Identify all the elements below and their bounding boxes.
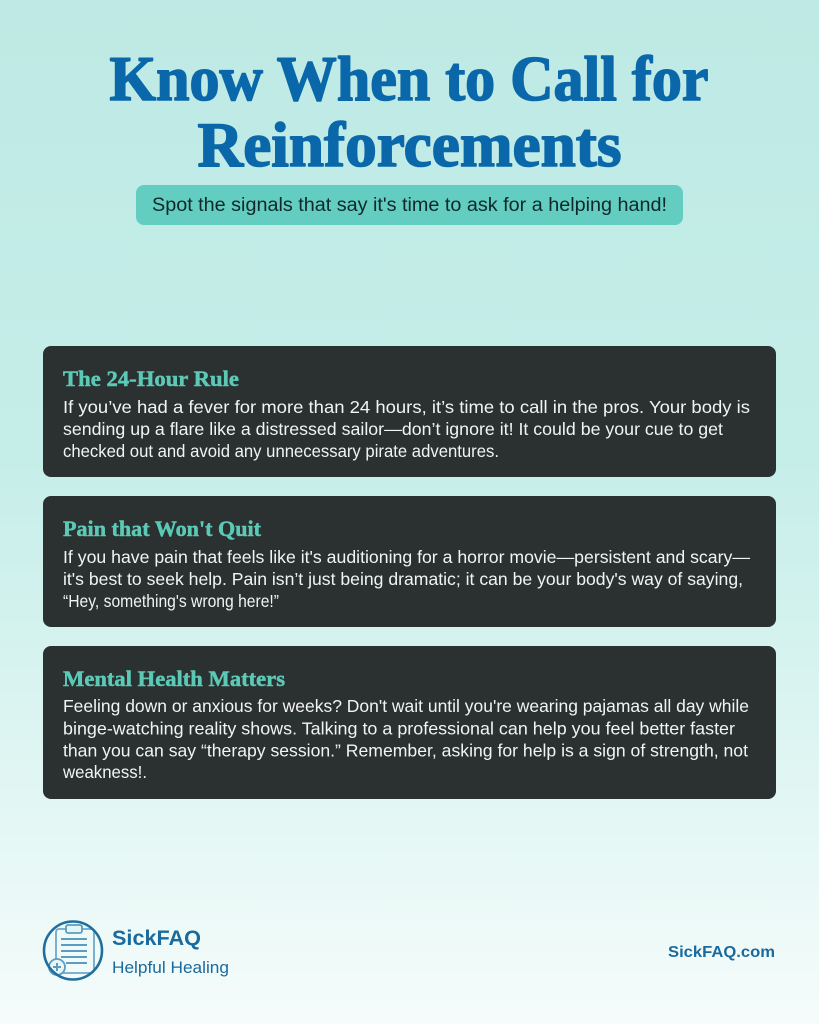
heading: pain that won't quit: Pain that Won't Quit bbox=[63, 516, 262, 541]
panel: mental health matters bbox=[43, 646, 776, 799]
tagline: Helpful Healing bbox=[112, 958, 229, 977]
title: Reinforcements bbox=[198, 109, 622, 180]
heading: mental health matters: Mental Health Matters bbox=[63, 666, 285, 691]
subtitle pill: Spot the signals that say it's time to ask for a helping hand! bbox=[152, 195, 667, 216]
text block: pain that won't quit: “Hey, something's wrong here!” bbox=[63, 591, 279, 611]
heading: the 24-hour rule: The 24-Hour Rule bbox=[63, 366, 239, 391]
text block: the 24-hour rule: sending up a flare like a distressed sailor—don’t ignore it! It could be your cue to get bbox=[63, 419, 723, 439]
panel: the 24-hour rule bbox=[43, 346, 776, 477]
brand name: SickFAQ bbox=[112, 927, 201, 950]
text block: mental health matters: weakness!. bbox=[62, 762, 147, 782]
text block: pain that won't quit: it's best to seek help. Pain isn’t just being dramatic; it can be your body's way of saying, bbox=[63, 569, 743, 589]
title: Know When to Call for bbox=[110, 43, 708, 114]
website: SickFAQ.com bbox=[668, 944, 775, 961]
text block: the 24-hour rule: If you’ve had a fever for more than 24 hours, it’s time to call in the pros. Your body is bbox=[63, 397, 750, 417]
text block: the 24-hour rule bbox=[63, 397, 750, 461]
title bbox=[110, 43, 708, 180]
icon: clipboard logo bbox=[44, 922, 102, 980]
text block: pain that won't quit: If you have pain that feels like it's auditioning for a horror movie—persistent and scary— bbox=[63, 547, 750, 567]
text block: pain that won't quit bbox=[63, 547, 750, 611]
text block: mental health matters: Feeling down or anxious for weeks? Don't wait until you're wearing pajamas all day while bbox=[63, 696, 749, 716]
text block: mental health matters: than you can say “therapy session.” Remember, asking for help is a sign of strength, not bbox=[63, 740, 748, 760]
text block: the 24-hour rule: checked out and avoid any unnecessary pirate adventures. bbox=[63, 441, 499, 461]
subtitle pill bbox=[136, 185, 683, 225]
text block: mental health matters: binge-watching reality shows. Talking to a professional can help you feel better faster bbox=[63, 718, 735, 738]
text block: mental health matters bbox=[62, 696, 749, 782]
panel: pain that won't quit bbox=[43, 496, 776, 627]
